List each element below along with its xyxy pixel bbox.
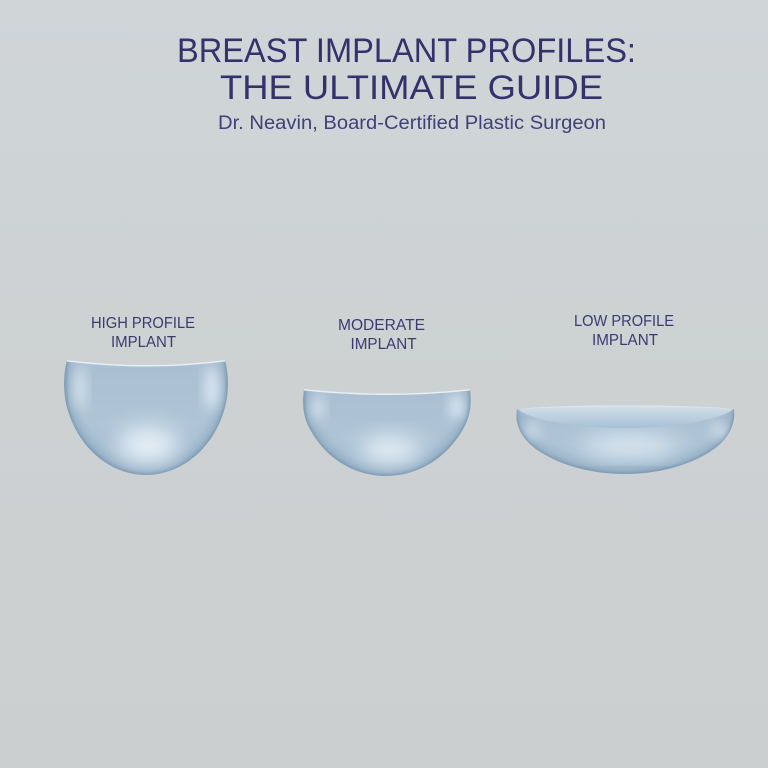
panel: high profile implant: [60, 315, 232, 480]
label: moderate: IMPLANT: [350, 336, 417, 353]
icon: low profile implant shape: [516, 405, 734, 474]
label: low profile: IMPLANT: [592, 332, 659, 349]
title: BREAST IMPLANT PROFILES:: [177, 32, 636, 70]
panel: low profile implant: [510, 313, 740, 480]
icon: high profile implant shape: [64, 360, 228, 475]
title: THE ULTIMATE GUIDE: [220, 69, 603, 107]
label: moderate: MODERATE: [338, 317, 425, 334]
panel: moderate implant: [298, 317, 476, 480]
label: high profile: HIGH PROFILE: [91, 315, 195, 332]
icon: moderate implant shape: [303, 389, 471, 476]
subtitle: Dr. Neavin, Board-Certified Plastic Surgeon: [218, 113, 606, 134]
title: [177, 32, 636, 107]
label: low profile: LOW PROFILE: [574, 313, 674, 330]
top lens rim: [517, 405, 734, 428]
label: high profile: [91, 315, 195, 351]
label: low profile: [574, 313, 674, 349]
label: high profile: IMPLANT: [111, 334, 177, 351]
label: moderate: [338, 317, 425, 353]
